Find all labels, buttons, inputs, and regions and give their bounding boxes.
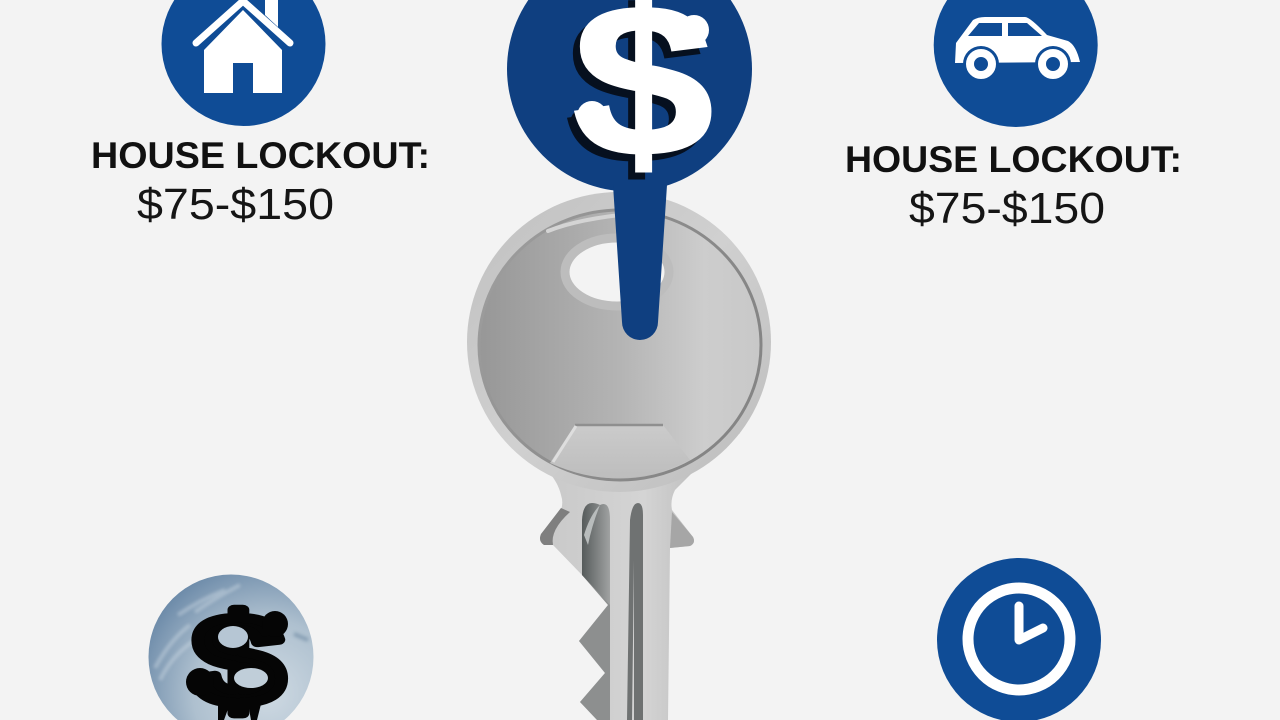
icon: car: [934, 0, 1098, 127]
pin marker with dollar sign: [507, 0, 752, 340]
pin tail: [613, 185, 667, 340]
ice texture: [155, 585, 308, 680]
icon: house: [162, 0, 326, 126]
key shoulder left highlight: [553, 426, 576, 462]
car lockout heading: HOUSE LOCKOUT:: [845, 139, 1182, 180]
key blade outline: [500, 433, 740, 720]
drips: [218, 700, 262, 720]
key hole: [565, 238, 669, 306]
house lockout item: [91, 0, 430, 229]
key: [467, 192, 771, 720]
icy disc: [148, 574, 314, 720]
house lockout price: $75-$150: [137, 180, 334, 229]
key left ear shadow: [540, 508, 570, 545]
icon: clock: [937, 558, 1101, 720]
key left groove highlight: [584, 505, 600, 545]
lower counter: [234, 668, 268, 688]
car lockout item: [845, 0, 1182, 233]
key shoulder top edge: [575, 424, 663, 426]
key right groove: [627, 503, 643, 720]
upper counter: [218, 626, 248, 648]
key head top highlight: [548, 213, 640, 231]
key teeth shading: [579, 575, 610, 720]
key shoulder plate: [550, 425, 690, 478]
key head disc: [479, 210, 761, 480]
car lockout price: $75-$150: [909, 184, 1105, 233]
key right ear shade: [670, 512, 694, 548]
pin circle: [507, 0, 752, 192]
icon: dripping dollar: [148, 574, 314, 720]
house lockout heading: HOUSE LOCKOUT:: [91, 135, 430, 176]
key head rim: [467, 192, 771, 492]
key left groove: [582, 503, 610, 605]
